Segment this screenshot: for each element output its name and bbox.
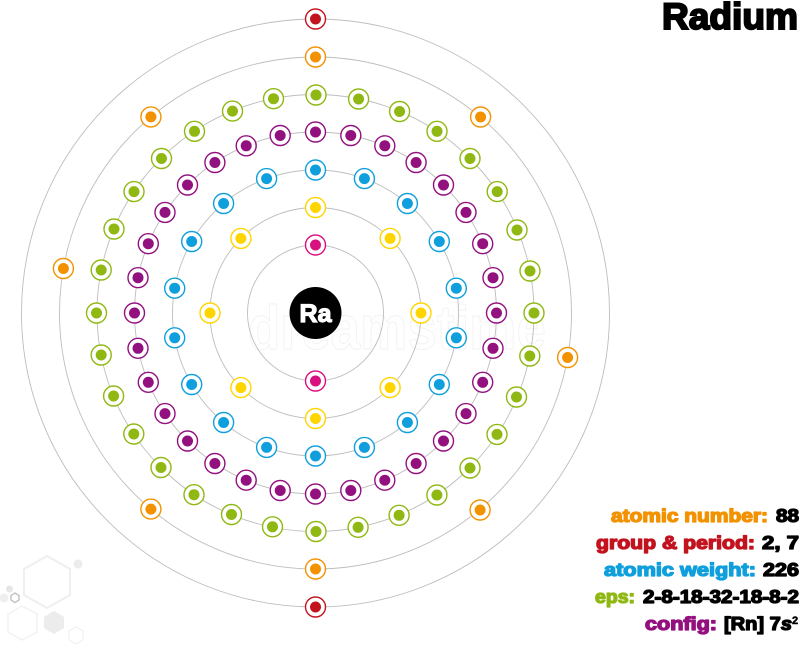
configuration label: 2 <box>792 615 798 627</box>
group and period label: 2, 7 <box>762 533 799 553</box>
hexagon decoration <box>0 556 83 644</box>
atomic weight label <box>604 560 799 580</box>
shell 7 electrons (red) <box>306 9 326 617</box>
orbit rings <box>22 19 610 607</box>
electrons per shell label <box>595 587 799 607</box>
atomic weight label: 226 <box>763 560 799 580</box>
shell 1 electrons (pink) <box>306 235 326 391</box>
watermark: dreamstime <box>248 294 546 363</box>
nucleus <box>290 287 342 339</box>
configuration label <box>645 614 798 634</box>
shell 2 electrons (yellow) <box>200 198 431 428</box>
configuration label: config: <box>645 614 717 634</box>
configuration label: [Rn] 7 s <box>724 614 792 634</box>
group and period label <box>596 533 799 553</box>
electrons per shell label: eps: <box>595 587 635 607</box>
shell 4 electrons (purple) <box>124 122 506 504</box>
atomic weight label: atomic weight: <box>604 560 756 580</box>
nucleus: Ra <box>300 300 333 328</box>
shell 5 electrons (green) <box>86 85 544 542</box>
shell 6 electrons (orange) <box>53 47 578 579</box>
group and period label: group & period: <box>596 533 755 553</box>
atomic number label: 88 <box>776 506 799 526</box>
atomic number label: atomic number: <box>611 506 768 526</box>
shell 3 electrons (blue) <box>165 160 466 466</box>
electrons per shell label: 2-8-18-32-18-8-2 <box>643 587 799 607</box>
